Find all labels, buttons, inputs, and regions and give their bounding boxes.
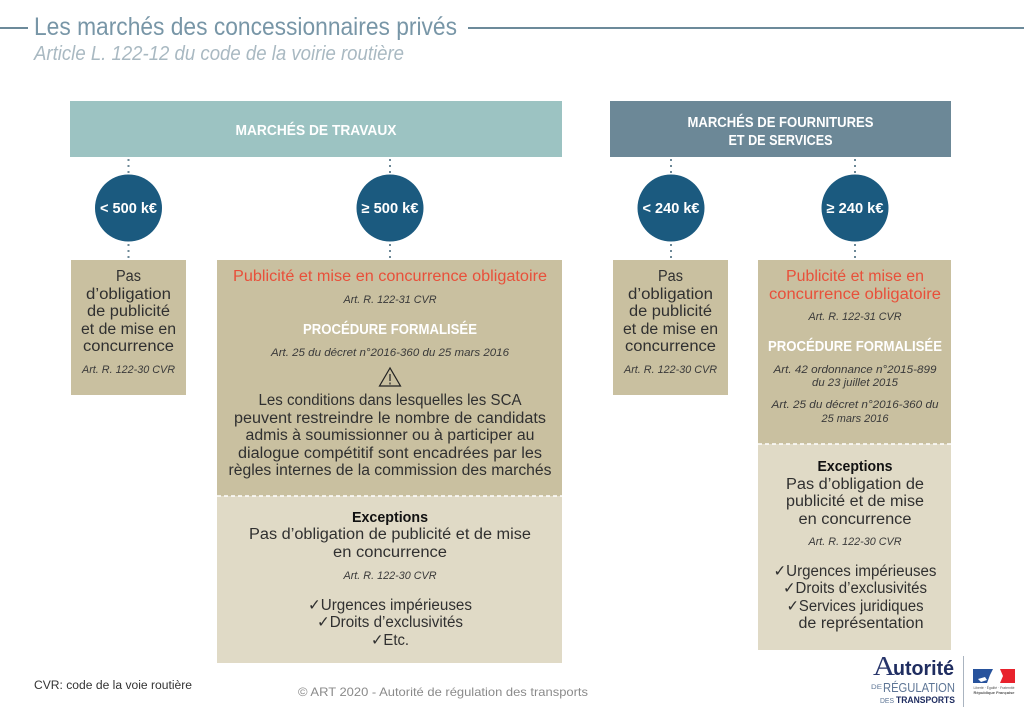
- panel: services below 240: concurrence: [625, 338, 716, 355]
- header: marchés de travaux: [70, 101, 562, 157]
- panel: travaux from 500: [217, 260, 562, 496]
- connector: thresholds: [128, 159, 855, 259]
- threshold: from 500: ≥ 500 k€: [362, 201, 418, 217]
- footnote: CVR: code de la voie routière: [34, 680, 192, 692]
- panel: travaux from 500: admis à soumissionner ou à participer au: [246, 427, 534, 444]
- logo: Autorité de régulation des transports: DE: [871, 684, 883, 691]
- panel: services from 240: Art. 42 ordonnance n°2015-899: [772, 364, 936, 376]
- panel: services below 240: d’obligation: [628, 286, 713, 303]
- panel: travaux exceptions: ✓Urgences impérieuses: [308, 597, 472, 614]
- panel: travaux from 500: Art. R. 122-31 CVR: [343, 294, 437, 306]
- panel: services from 240: 25 mars 2016: [821, 413, 889, 425]
- panel: travaux below 500: de publicité: [87, 303, 170, 320]
- panel: travaux below 500: [71, 260, 186, 395]
- panel: services from 240: du 23 juillet 2015: [812, 377, 899, 389]
- panel: services from 240: Art. 25 du décret n°2016-360 du: [770, 399, 938, 411]
- panel: travaux from 500: PROCÉDURE FORMALISÉE: [303, 321, 477, 338]
- panel: travaux below 500: concurrence: [83, 338, 174, 355]
- panel: travaux exceptions: Art. R. 122-30 CVR: [343, 570, 437, 582]
- logo: Autorité de régulation des transports: DES: [880, 698, 894, 705]
- panel: travaux from 500: Publicité et mise en concurrence obligatoire: [233, 268, 547, 285]
- icon: warning: [380, 368, 400, 386]
- logo: République française: République Française: [974, 691, 1015, 695]
- logo: Autorité de régulation des transports: RÉGULATION: [883, 680, 955, 695]
- threshold: below 500: [95, 174, 162, 242]
- threshold: from 240: ≥ 240 k€: [826, 201, 884, 217]
- panel: services from 240: concurrence obligatoire: [769, 286, 941, 303]
- panel: travaux exceptions: Exceptions: [352, 509, 428, 526]
- threshold: from 240: [822, 174, 888, 242]
- panel: services exceptions: ✓Services juridiques: [786, 598, 924, 615]
- panel: services exceptions: ✓Droits d’exclusivités: [783, 580, 927, 597]
- panel: services below 240: et de mise en: [623, 321, 718, 338]
- panel: travaux from 500: Art. 25 du décret n°2016-360 du 25 mars 2016: [270, 347, 510, 359]
- header: marchés de fournitures et de services: ET DE SERVICES: [728, 133, 833, 149]
- logo: Autorité de régulation des transports: TRANSPORTS: [896, 695, 955, 705]
- title: Les marchés des concessionnaires privés: [34, 13, 457, 41]
- panel: travaux exceptions: [217, 496, 562, 663]
- threshold: below 240: < 240 k€: [642, 201, 700, 217]
- panel: travaux from 500: dialogue compétitif sont encadrées par les: [238, 445, 542, 462]
- panel: services exceptions: Exceptions: [818, 458, 892, 475]
- copyright: © ART 2020 - Autorité de régulation des transports: [298, 685, 588, 699]
- header: marchés de fournitures et de services: [610, 101, 951, 157]
- logo: République française: [973, 669, 1015, 695]
- panel: services from 240: PROCÉDURE FORMALISÉE: [768, 338, 942, 355]
- panel: services below 240: Pas: [658, 268, 683, 285]
- panel: travaux exceptions: en concurrence: [333, 544, 447, 561]
- panel: services exceptions: Pas d’obligation de: [786, 476, 924, 493]
- panel: services exceptions: en concurrence: [798, 511, 912, 528]
- panel: services below 240: de publicité: [629, 303, 712, 320]
- logo: Autorité de régulation des transports: A: [873, 651, 896, 681]
- panel: services from 240: Publicité et mise en: [786, 268, 924, 285]
- panel: services below 240: Art. R. 122-30 CVR: [623, 364, 717, 376]
- panel: services from 240: Art. R. 122-31 CVR: [808, 311, 902, 323]
- threshold: below 240: [638, 174, 704, 242]
- panel: services exceptions: Art. R. 122-30 CVR: [808, 536, 902, 548]
- logo: Autorité de régulation des transports: utorité: [893, 658, 954, 680]
- panel: travaux exceptions: ✓Droits d’exclusivités: [317, 614, 463, 631]
- threshold: from 500: [356, 174, 424, 242]
- panel: travaux below 500: d’obligation: [86, 286, 171, 303]
- panel: travaux below 500: et de mise en: [81, 321, 176, 338]
- panel: travaux from 500: Les conditions dans lesquelles les SCA: [258, 392, 522, 409]
- header: marchés de travaux: MARCHÉS DE TRAVAUX: [236, 122, 397, 139]
- logo: République française: Liberté · Égalité · Fraternité: [974, 685, 1015, 690]
- subtitle: Article L. 122-12 du code de la voirie routière: [33, 43, 404, 65]
- panel: services exceptions: ✓Urgences impérieuses: [774, 563, 937, 580]
- header: marchés de fournitures et de services: MARCHÉS DE FOURNITURES: [688, 114, 874, 131]
- panel: travaux below 500: Pas: [116, 268, 141, 285]
- threshold: below 500: < 500 k€: [100, 201, 157, 217]
- panel: travaux exceptions: ✓Etc.: [371, 632, 409, 649]
- panel: travaux from 500: règles internes de la commission des marchés: [228, 462, 552, 479]
- panel: travaux exceptions: Pas d’obligation de publicité et de mise: [249, 526, 531, 543]
- panel: services below 240: [613, 260, 728, 395]
- panel: services from 240: [758, 260, 951, 444]
- panel: travaux from 500: peuvent restreindre le nombre de candidats: [234, 410, 546, 427]
- logo: Autorité de régulation des transports: [871, 651, 964, 707]
- panel: services exceptions: publicité et de mise: [786, 493, 924, 510]
- panel: services exceptions: de représentation: [798, 615, 924, 632]
- panel: services exceptions: [758, 444, 951, 650]
- panel: travaux below 500: Art. R. 122-30 CVR: [81, 364, 175, 376]
